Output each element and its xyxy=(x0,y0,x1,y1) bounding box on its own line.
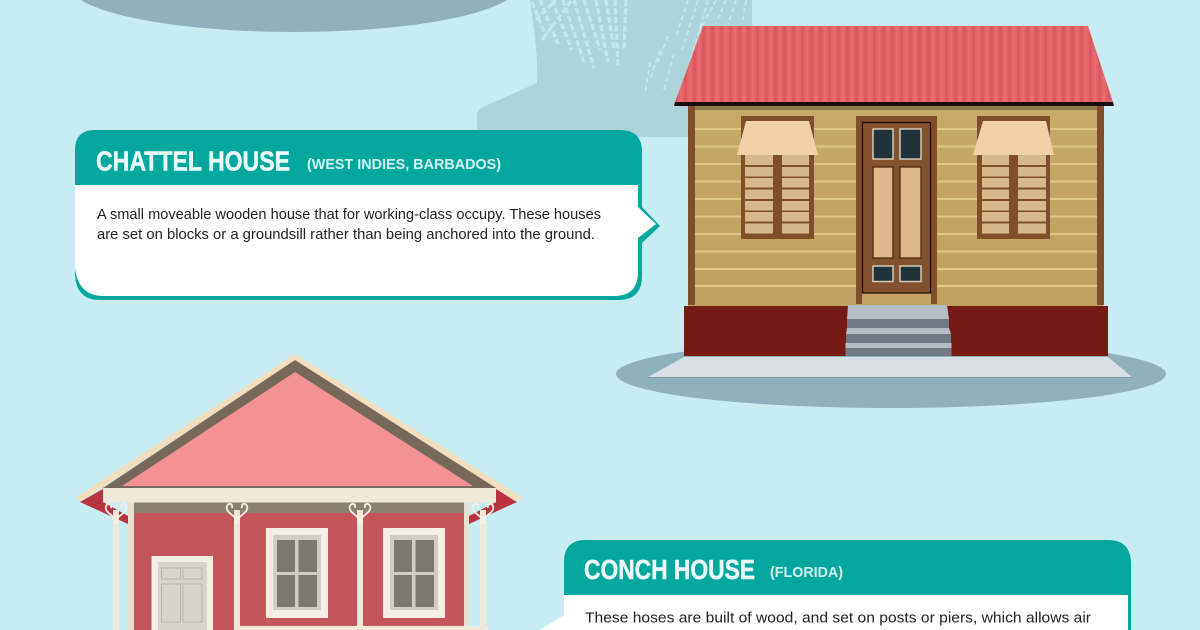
background tree silhouette xyxy=(477,0,752,137)
gable pink face xyxy=(122,372,473,486)
panel: chattel house callout xyxy=(75,130,660,300)
panel white body with pointer xyxy=(540,595,1128,630)
illustration: chattel house xyxy=(616,26,1166,408)
front steps xyxy=(846,305,952,356)
columns and scroll brackets xyxy=(106,504,493,630)
panel description: A small moveable wooden house that for working-class occupy. These houses xyxy=(97,207,601,223)
porch rail xyxy=(238,626,488,630)
panel shadow and teal edge xyxy=(75,130,660,300)
panel teal header and edge xyxy=(564,540,1131,630)
gable outer trim xyxy=(75,354,523,501)
foundation xyxy=(684,306,1108,356)
window 2 xyxy=(383,528,445,618)
cream beam xyxy=(103,488,496,502)
panel description: are set on blocks or a groundsill rather than being anchored into the ground. xyxy=(97,227,595,243)
ground shadow of previous house xyxy=(69,0,519,32)
right window xyxy=(973,116,1054,239)
roof xyxy=(674,26,1114,106)
panel: conch house callout xyxy=(540,540,1131,630)
ground shadow xyxy=(616,340,1166,408)
window 1 xyxy=(266,528,328,618)
left window xyxy=(737,116,818,239)
wall siding xyxy=(688,105,1104,306)
panel title: CHATTEL HOUSE xyxy=(96,146,290,176)
red gable underside xyxy=(80,489,517,524)
illustration: conch house xyxy=(75,354,523,630)
door xyxy=(856,116,937,304)
panel white body xyxy=(75,185,656,296)
gable dark band xyxy=(103,360,496,488)
wall xyxy=(128,502,469,630)
panel region: (FLORIDA) xyxy=(770,564,843,581)
panel description: These hoses are built of wood, and set on posts or piers, which allows air xyxy=(585,610,1091,626)
panel title: CONCH HOUSE xyxy=(584,554,755,585)
concrete slab xyxy=(648,357,1132,377)
panel region: (WEST INDIES, BARBADOS) xyxy=(307,156,501,173)
door xyxy=(152,556,213,630)
